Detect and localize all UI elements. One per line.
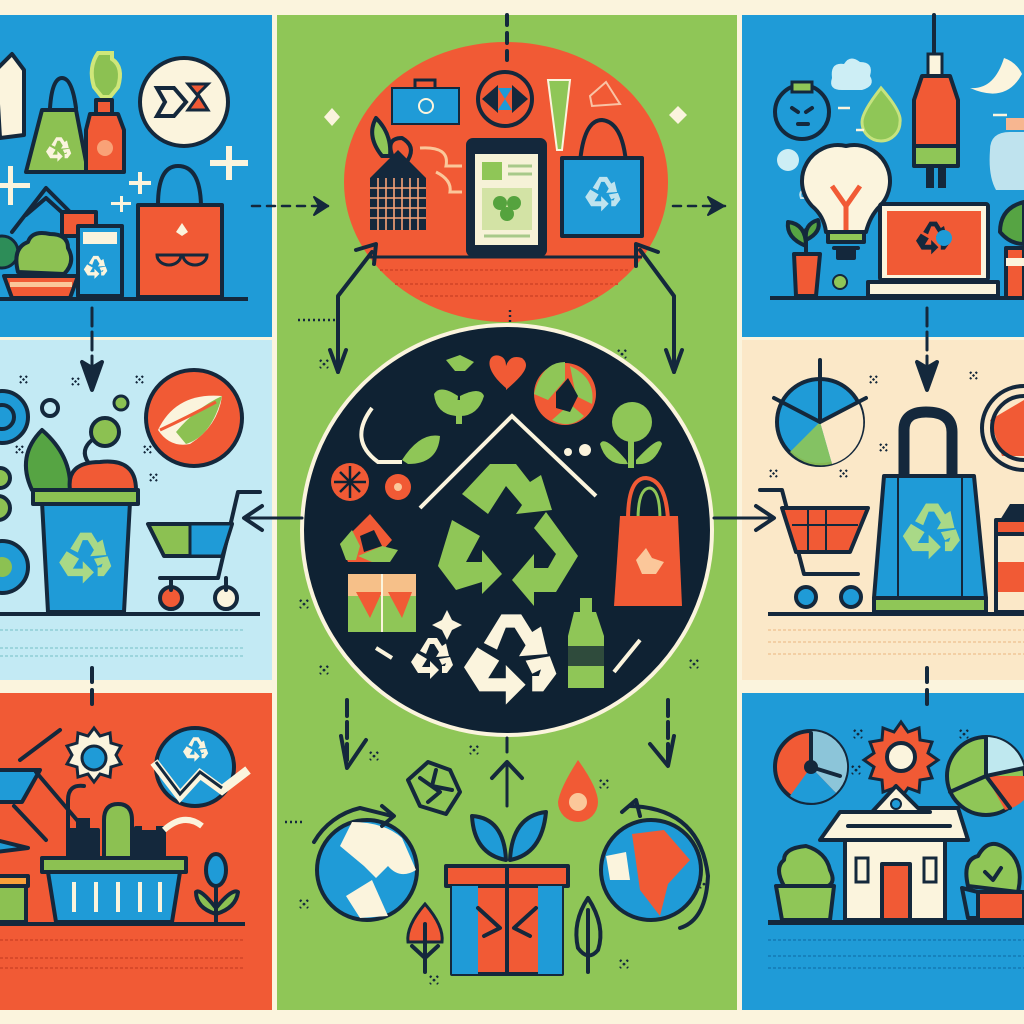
icon: crescent arrow xyxy=(361,408,402,462)
icon: globe right xyxy=(601,800,708,928)
icon: triangle sign xyxy=(590,82,620,106)
icon: takeaway cup xyxy=(996,504,1024,612)
hub: dark recycling circle xyxy=(302,325,712,735)
icon: price tag xyxy=(0,54,24,138)
icon: red bottle xyxy=(86,100,124,172)
icon: cone xyxy=(548,80,570,150)
icon: plant right xyxy=(1000,202,1024,298)
panel: top left blue xyxy=(0,15,272,337)
icon: light bulb outline xyxy=(92,53,120,97)
icon: moon xyxy=(970,58,1022,94)
icon: globe slice xyxy=(982,386,1024,470)
icon: sun gear xyxy=(67,728,121,782)
arrow: hub to left panel xyxy=(244,506,302,530)
panel: top orange circle xyxy=(344,42,668,322)
arrow: up from box xyxy=(492,738,522,806)
icon: house xyxy=(820,786,968,920)
sparkles and small marks xyxy=(324,106,687,126)
icon: small dots xyxy=(564,444,591,456)
shelf line xyxy=(768,612,1024,616)
small marks bottom xyxy=(285,746,708,984)
icon: green pot left xyxy=(0,840,28,922)
arrow: hub to right panel xyxy=(714,506,774,530)
icon: plant hook and solar grid xyxy=(370,118,462,230)
icon: orange drop xyxy=(558,760,598,822)
icon: gift box with leaves xyxy=(446,812,568,974)
shelf line xyxy=(770,296,1024,300)
text lines placeholder xyxy=(0,630,245,656)
icon: light bulb xyxy=(802,145,890,258)
icon: cloud xyxy=(831,58,872,90)
chart: pie clock xyxy=(774,360,866,465)
arrow: down right xyxy=(917,308,937,390)
connector dashed top xyxy=(505,15,509,60)
icon: basket with bottles xyxy=(42,786,202,922)
chart: donut xyxy=(775,731,847,803)
icon: potted plant xyxy=(788,220,820,296)
text lines placeholder xyxy=(0,940,245,968)
shelf line xyxy=(368,256,642,258)
icon: orange leaf circle xyxy=(146,370,242,466)
icon: recycling circle with check xyxy=(154,728,248,806)
icon: box xyxy=(348,574,416,632)
sparkle and dashes xyxy=(432,610,462,640)
icon: sprout xyxy=(434,355,484,424)
icon: green tote bag xyxy=(26,78,88,172)
icon: hanging bottle xyxy=(914,15,958,188)
icon: tote bag xyxy=(874,412,986,612)
icon: leaf right xyxy=(576,898,600,972)
panel: mid left light blue xyxy=(0,308,272,680)
icon: apple and leaves xyxy=(26,418,136,490)
icon: white recycling big xyxy=(464,614,556,705)
icon: small plant xyxy=(196,854,238,922)
icon: right plant pot xyxy=(962,844,1024,920)
panel: center green xyxy=(252,15,737,1010)
icon: house outline xyxy=(420,416,596,508)
arrow: curved right xyxy=(636,244,682,372)
panel: top right blue xyxy=(742,15,1024,337)
connector dashed xyxy=(90,668,94,708)
shelf line xyxy=(768,920,1024,925)
icon: bottle right xyxy=(990,118,1024,190)
icon: orange shopping bag xyxy=(138,166,222,297)
icon: tablet with leaf xyxy=(468,140,545,255)
icon: recycling bin xyxy=(33,490,138,612)
icon: sun gear xyxy=(864,722,938,798)
icon: house with plant and crate xyxy=(0,188,122,298)
icon: side circles xyxy=(0,391,128,593)
shelf line xyxy=(0,922,245,926)
icon: heart xyxy=(489,355,526,390)
icon: large recycling symbol xyxy=(438,464,578,606)
chart: pie xyxy=(947,737,1024,815)
small marks xyxy=(852,730,968,774)
icon: plus sparkles xyxy=(0,146,248,212)
icon: shopping cart xyxy=(148,492,260,609)
icon: water drop xyxy=(862,88,900,141)
icon: globe left xyxy=(314,806,417,920)
icon: recycle triangle xyxy=(340,514,398,562)
icon: red circles xyxy=(331,463,411,501)
connector: up and down into bottom section xyxy=(341,700,674,768)
icon: blue briefcase xyxy=(392,80,459,124)
icon: blue recycling bag xyxy=(562,120,642,236)
icon: left plant pot xyxy=(776,846,834,920)
small dots and clouds xyxy=(777,149,847,289)
icon: laptop xyxy=(868,204,998,296)
icon: white recycling small xyxy=(411,638,453,679)
icon: head circle xyxy=(775,82,829,139)
icon: red recycled bag xyxy=(614,478,682,606)
icon: green bottle xyxy=(568,598,604,688)
icon: crumpled paper xyxy=(408,762,460,814)
arrow: curved left xyxy=(330,244,376,372)
panel: bottom left orange xyxy=(0,668,272,1010)
small cross marks xyxy=(16,376,157,481)
arrow: down xyxy=(82,308,102,390)
arrows: horizontal top xyxy=(252,197,725,215)
icon: circle with arrows xyxy=(140,58,228,146)
icon: leaf left xyxy=(408,904,442,972)
icon: small leaf xyxy=(402,436,440,464)
panel: mid right cream xyxy=(742,308,1024,680)
icon: wheelbarrow xyxy=(0,730,82,840)
small cross marks xyxy=(770,372,977,477)
icon: compass circle xyxy=(478,72,532,126)
icon: cart xyxy=(760,490,868,607)
connector dashed xyxy=(925,668,929,712)
shelf line xyxy=(0,612,260,616)
icon: young tree xyxy=(600,402,662,468)
panel: bottom right blue xyxy=(742,668,1024,1010)
shelf line xyxy=(0,297,248,301)
icon: recycle ball xyxy=(534,362,596,425)
dashes xyxy=(838,108,1007,130)
